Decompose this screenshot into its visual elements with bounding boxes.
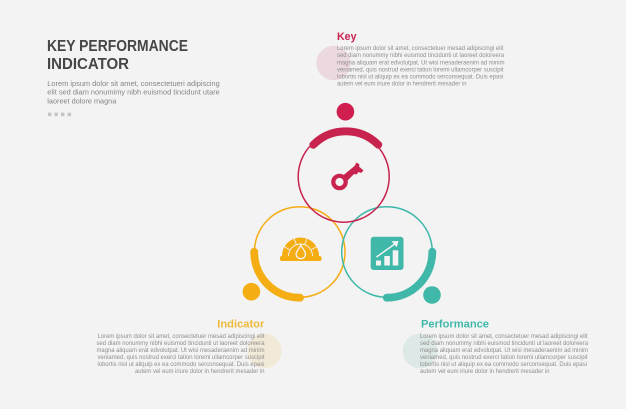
red ring (298, 131, 389, 222)
heading: key: Key (337, 31, 357, 43)
body text: performance: Lorem ipsum dolor sit amet, consectetuer mesad adipiscingi elit (420, 333, 588, 340)
heading: indicator: Indicator (217, 318, 265, 330)
body text: key: autem vel eum iriure dolor in hendrerit mesader in (337, 80, 467, 88)
body text: indicator: veniamed, quis nostrud exerci tation loremi ullamcorper suscipit (98, 354, 265, 361)
title block (47, 38, 220, 116)
intro text (47, 79, 220, 105)
body text: indicator: Lorem ipsum dolor sit amet, consectetuer mesad adipiscingi elit (98, 333, 265, 340)
diagram: three linked circles (243, 103, 441, 304)
panel: key text (316, 31, 504, 88)
body text: performance: autem vel eum iriure dolor in hendrerit mesader in (420, 368, 550, 375)
body text: key: magna aliquam erat edvolutpat. Ut wisi mesaderaenim ad minim (337, 59, 504, 66)
pale circle: key (316, 46, 351, 80)
icon: growth chart (371, 237, 404, 270)
body text: indicator: autem vel eum iriure dolor in hendrerit mesader in (135, 368, 265, 375)
heading: INDICATOR (47, 56, 129, 73)
body text: indicator (96, 333, 265, 375)
body text: key: Lorem ipsum dolor sit amet, consectetuer mesad adipiscingi elit (337, 45, 504, 52)
heading (47, 38, 188, 73)
body text: performance: sed diam nonummy nibhi euismod tincidunti ut laoreet doloreera (420, 340, 588, 347)
body text: key: lobortis nisl ut aliquip ex ea commodo serconsequat. Duis epasi (337, 73, 504, 80)
body text: performance (420, 333, 588, 375)
heading: KEY PERFORMANCE (47, 38, 188, 55)
panel: indicator text (96, 318, 282, 375)
yellow dot (243, 283, 260, 301)
body text: key (337, 45, 504, 88)
body text: key: sed diam nonummy nibhi euismod tincidunti ut laoreet doloreera (337, 52, 504, 59)
yellow ring (254, 207, 345, 298)
body text: indicator: magna aliquam erat edvolutpat. Ut wisi mesaderaenim ad minim (96, 347, 264, 354)
pagination dots (48, 113, 71, 116)
panel: performance text (403, 318, 588, 375)
intro text: Lorem ipsum dolor sit amet, consectetueri adipiscing (47, 79, 220, 88)
heading: performance: Performance (421, 318, 489, 330)
pale circle: performance (403, 334, 437, 368)
body text: performance: veniamed, quis nostrud exerci tation loremi ullamcorper suscipit (420, 354, 588, 361)
teal ring (342, 207, 432, 298)
pale circle: indicator (247, 334, 282, 368)
intro text: laoreet dolore magna (47, 96, 117, 105)
teal dot (423, 286, 441, 304)
body text: key: veniamed, quis nostrud exerci tation loremi ullamcorper suscipit (337, 66, 504, 73)
body text: performance: magna aliquam erat edvolutpat. Ut wisi mesaderaenim ad minim (420, 347, 588, 354)
body text: performance: lobortis nisl ut aliquip ex ea commodo serconsequat. Duis epasi (420, 361, 587, 368)
icon: gauge (280, 238, 322, 261)
intro text: elit sed diam nonumimy nibh euismod tincidunt utare (47, 88, 220, 97)
red dot (337, 103, 354, 120)
body text: indicator: sed diam nonummy nibhi euismod tincidunti ut laoreet doloreera (96, 340, 265, 347)
icon: key (333, 162, 364, 188)
body text: indicator: lobortis nisl ut aliquip ex ea commodo serconsequat. Duis epasi (98, 361, 264, 368)
